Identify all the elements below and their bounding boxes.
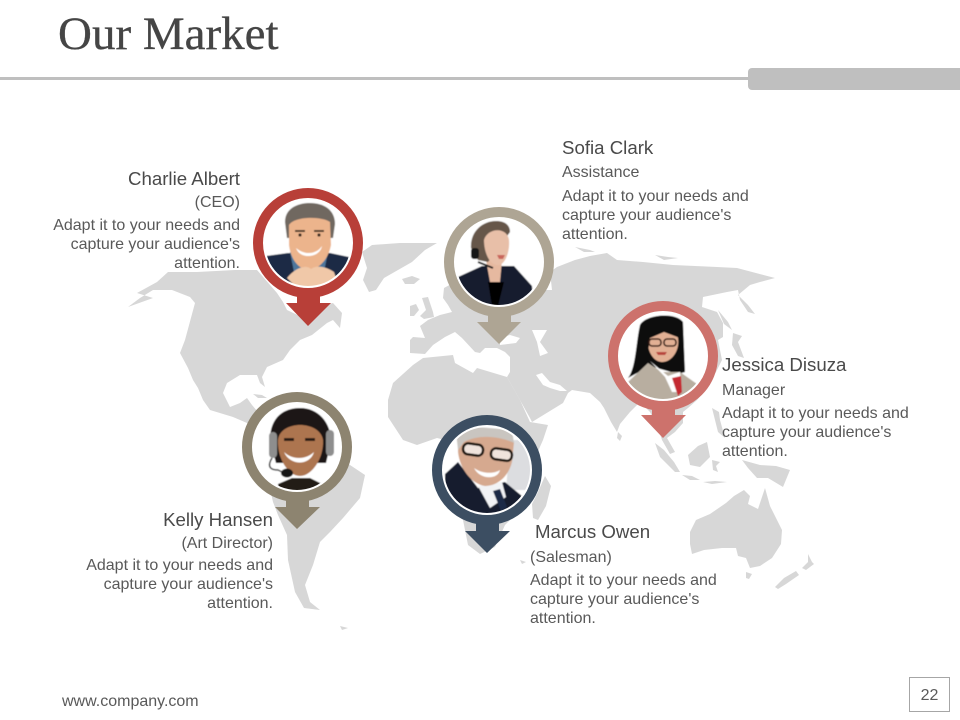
description: Adapt it to your needs and	[530, 572, 717, 589]
name: Charlie Albert	[128, 168, 240, 189]
description	[86, 557, 273, 612]
description: capture your audience's	[722, 424, 891, 441]
title: Our Market	[58, 8, 279, 60]
role: (CEO)	[195, 194, 240, 211]
pin: Kelly Hansen	[247, 397, 347, 529]
description: attention.	[207, 595, 273, 612]
name: Jessica Disuza	[722, 354, 846, 375]
description: capture your audience's	[104, 576, 273, 593]
name: Sofia Clark	[562, 137, 653, 158]
role: (Art Director)	[181, 535, 273, 552]
text: Jessica Disuza	[722, 354, 909, 460]
photo: Kelly	[268, 407, 334, 490]
description: Adapt it to your needs and	[562, 188, 749, 205]
text: Marcus Owen	[530, 521, 717, 627]
text: Sofia Clark	[562, 137, 749, 243]
text: Charlie Albert	[53, 168, 240, 272]
description: attention.	[174, 255, 240, 272]
description	[722, 405, 909, 460]
description: attention.	[722, 443, 788, 460]
name: Kelly Hansen	[163, 509, 273, 530]
header tab	[748, 68, 960, 90]
photo: Charlie	[267, 202, 349, 286]
pin: Jessica Disuza	[613, 306, 713, 438]
pin: Sofia Clark	[449, 212, 549, 344]
description: capture your audience's	[530, 591, 699, 608]
photo: Marcus	[444, 427, 532, 515]
description: Adapt it to your needs and	[86, 557, 273, 574]
header rule	[0, 77, 750, 80]
photo: Jessica	[628, 314, 696, 399]
role: Manager	[722, 382, 785, 399]
description: capture your audience's	[562, 207, 731, 224]
text: Kelly Hansen	[86, 509, 273, 612]
footer url: www.company.com	[62, 693, 199, 710]
name: Marcus Owen	[535, 521, 650, 542]
description: Adapt it to your needs and	[53, 217, 240, 234]
role: (Salesman)	[530, 549, 612, 566]
pin: Marcus Owen	[437, 420, 537, 553]
map inland seas	[500, 330, 567, 391]
page number	[909, 677, 950, 712]
world map	[128, 243, 814, 630]
page number: 22	[921, 687, 938, 704]
description: attention.	[562, 226, 628, 243]
description	[562, 188, 749, 243]
pin: Charlie Albert	[258, 193, 358, 326]
description: Adapt it to your needs and	[722, 405, 909, 422]
description: capture your audience's	[71, 236, 240, 253]
role: Assistance	[562, 164, 639, 181]
description	[53, 217, 240, 272]
description	[530, 572, 717, 627]
description: attention.	[530, 610, 596, 627]
photo: Sofia	[458, 220, 533, 305]
